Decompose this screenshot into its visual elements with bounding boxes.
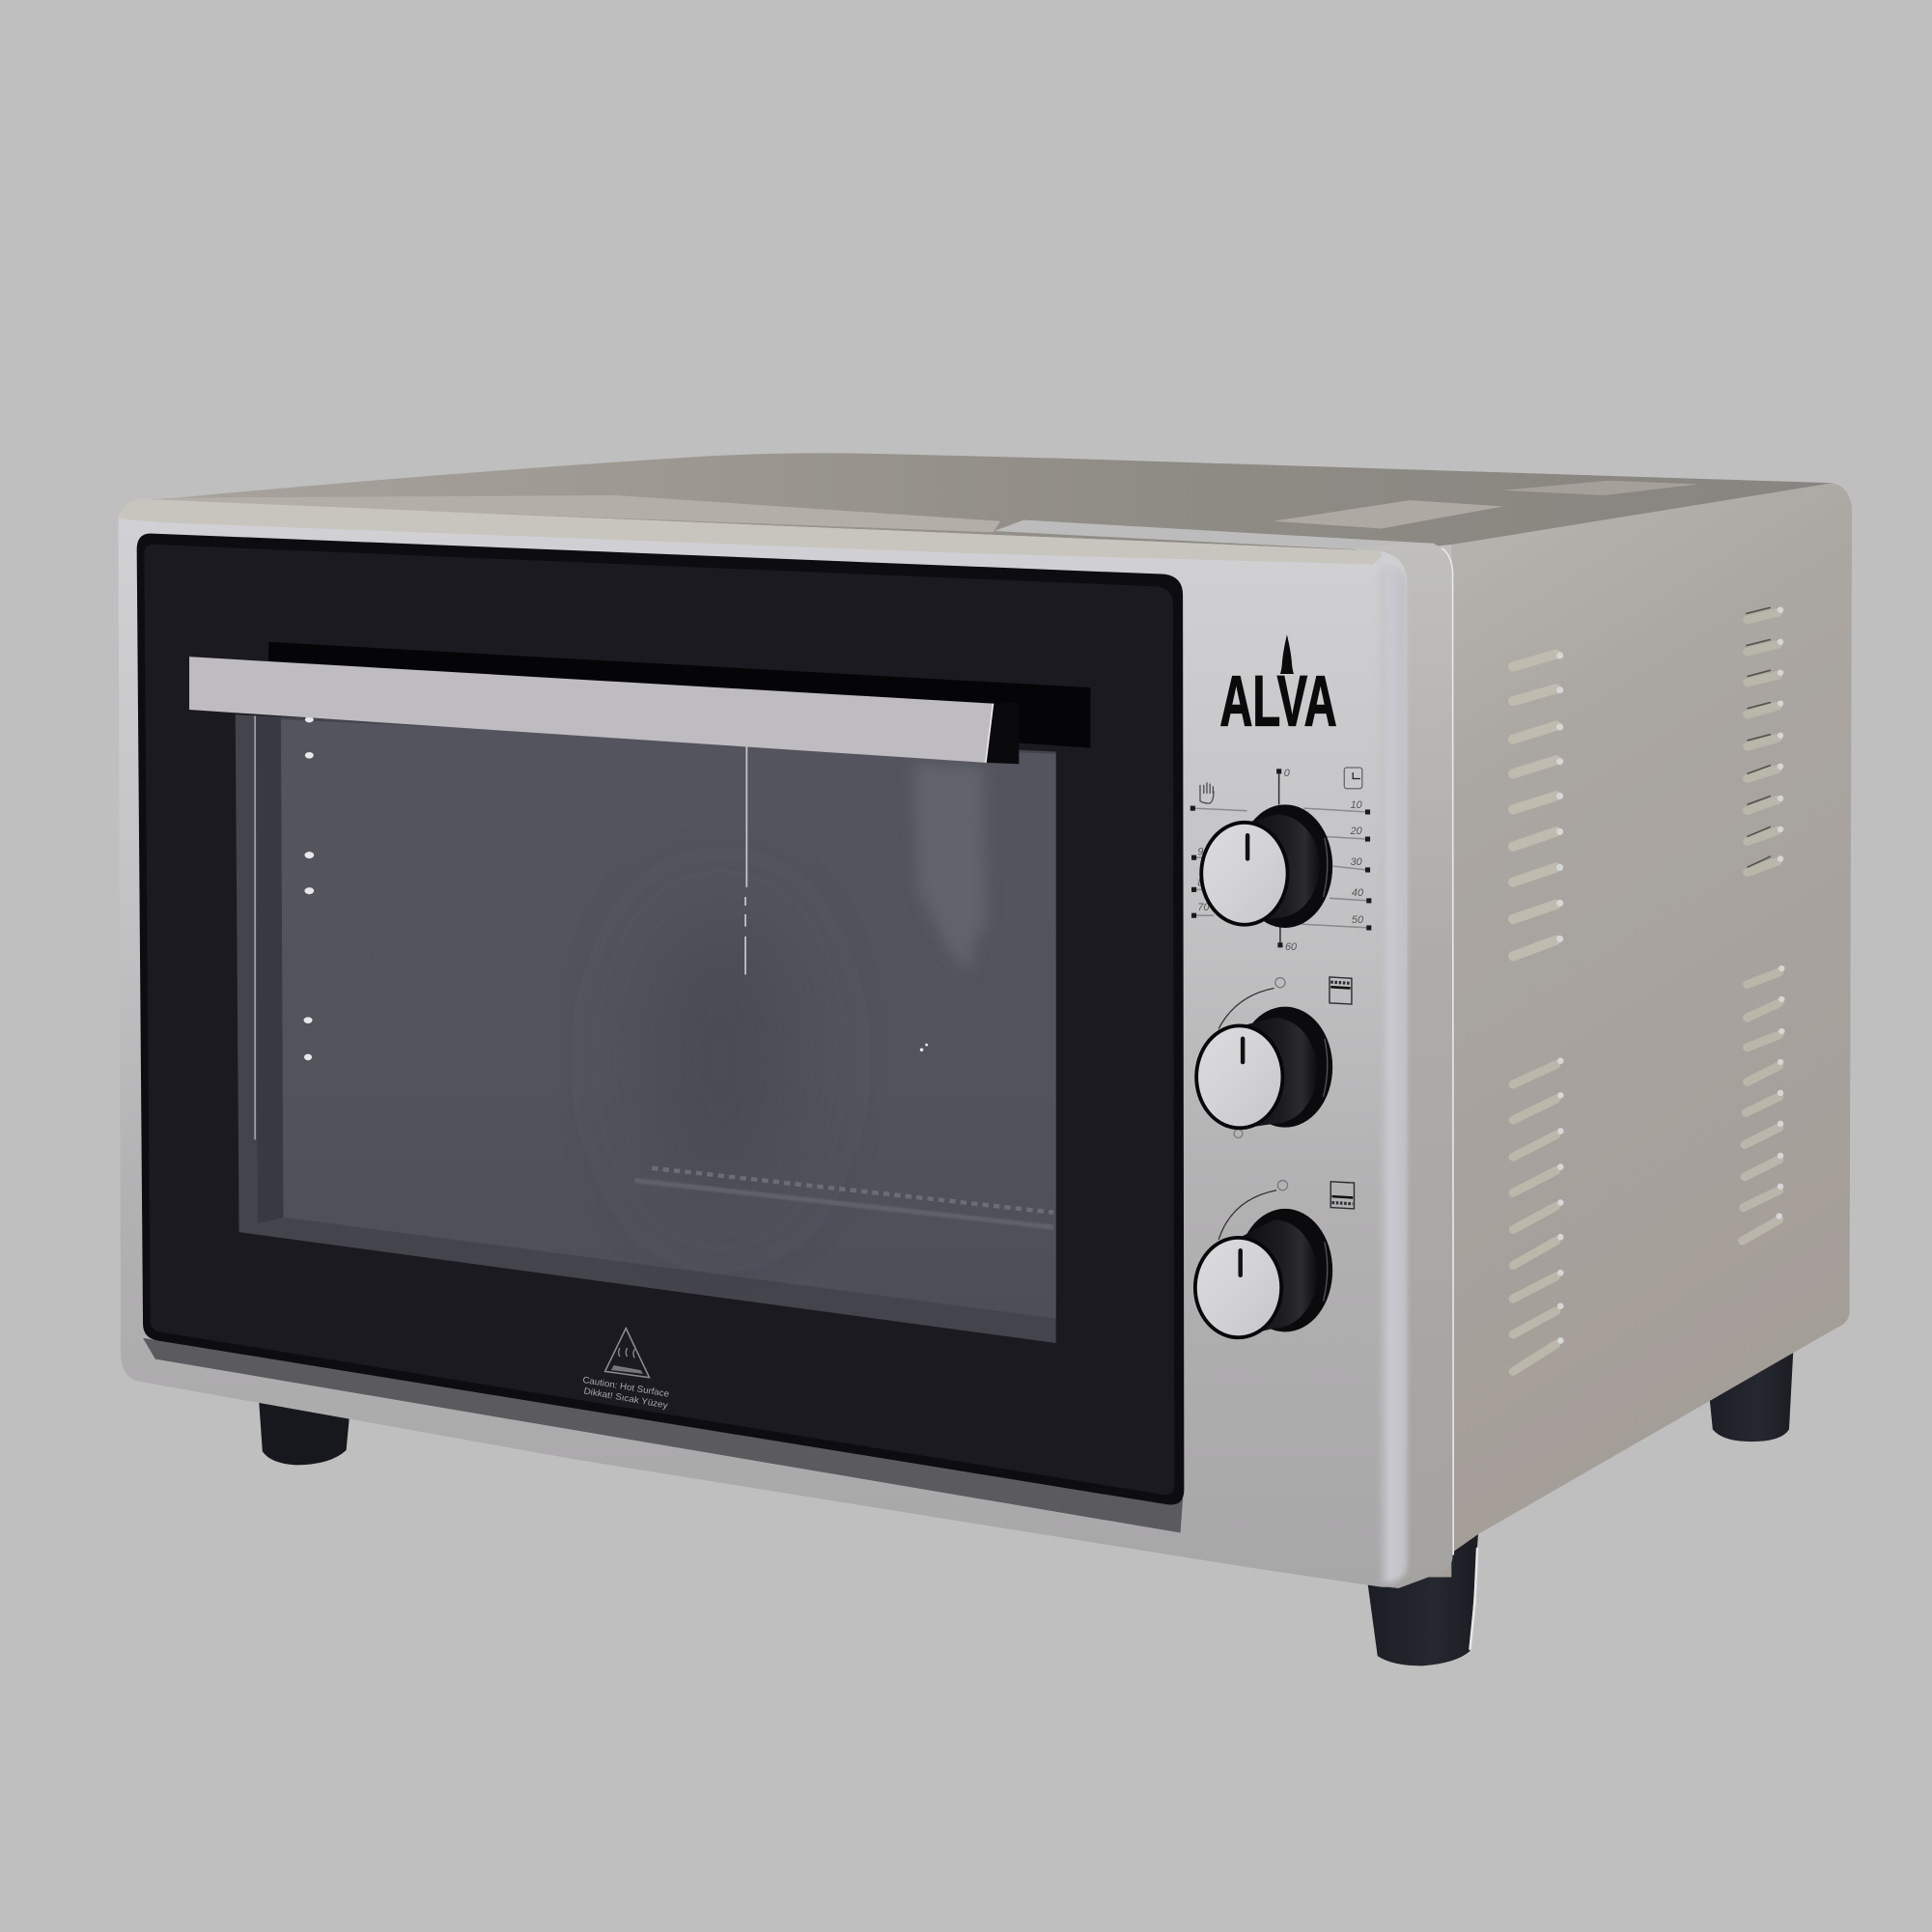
control panel highlight strip [1376,566,1407,1583]
timer numbers: 90 [1197,847,1209,858]
rack dots [304,716,928,1060]
tape patch 2 [1502,481,1698,495]
timer numbers: 80 [1197,878,1209,889]
door handle [189,657,1019,764]
oven [119,453,1852,1666]
tape patch 1 [1273,500,1503,528]
vents: left column lower [1513,1057,1564,1371]
front return edge [1356,544,1453,1588]
logo wordmark: ALVA [1219,661,1337,742]
warning label [582,1329,670,1411]
hot surface triangle [605,1329,650,1378]
timer numbers: 40 [1352,887,1363,899]
timer numbers: 70 [1197,902,1209,913]
oven window [236,714,1056,1343]
foot: rear right [1708,1337,1794,1442]
oven door [137,533,1184,1504]
vents: left column upper [1513,652,1563,956]
foot: front right [1368,1527,1478,1666]
front top lip [120,499,1382,564]
knob: bottom heat [1195,1209,1332,1337]
reflection [914,764,986,971]
handle shadow [268,642,1090,748]
timer numbers: 10 [1351,799,1362,811]
turkish caution text: Dikkat! Sıcak Yüzey [583,1386,669,1411]
icon: hand [1200,782,1214,803]
timer numbers: 50 [1352,914,1363,926]
oven front frame [119,499,1407,1587]
timer numbers: 30 [1351,856,1362,868]
logo: ALVA [1219,634,1337,742]
silver label strip [994,520,1444,554]
rack rail lines [254,715,256,1139]
caution text: Caution: Hot Surface [582,1375,670,1400]
timer numbers [1197,768,1363,953]
timer numbers: 0 [1284,768,1290,779]
knob: top heat [1196,1007,1332,1129]
timer scale [1190,768,1371,953]
foot: front left [259,1398,350,1465]
timer numbers: 20 [1350,826,1362,837]
control arc: lower [1218,1181,1288,1240]
oven top surface [139,453,1833,554]
logo flame [1280,634,1294,674]
icon: clock [1344,768,1362,789]
knob: timer [1201,804,1332,928]
top lip strip [139,495,1000,532]
icon: lower heater [1330,1182,1354,1209]
vents: right column upper [1746,607,1783,873]
vents: right column lower [1742,966,1785,1241]
rack at bottom [634,1168,1053,1227]
icon: upper heater [1330,977,1352,1004]
timer numbers: 60 [1285,941,1297,953]
oven side panel [1417,483,1852,1577]
white edge highlight [1442,548,1453,1554]
control arc: upper [1218,978,1285,1138]
frame bottom shadow [143,1338,1183,1533]
